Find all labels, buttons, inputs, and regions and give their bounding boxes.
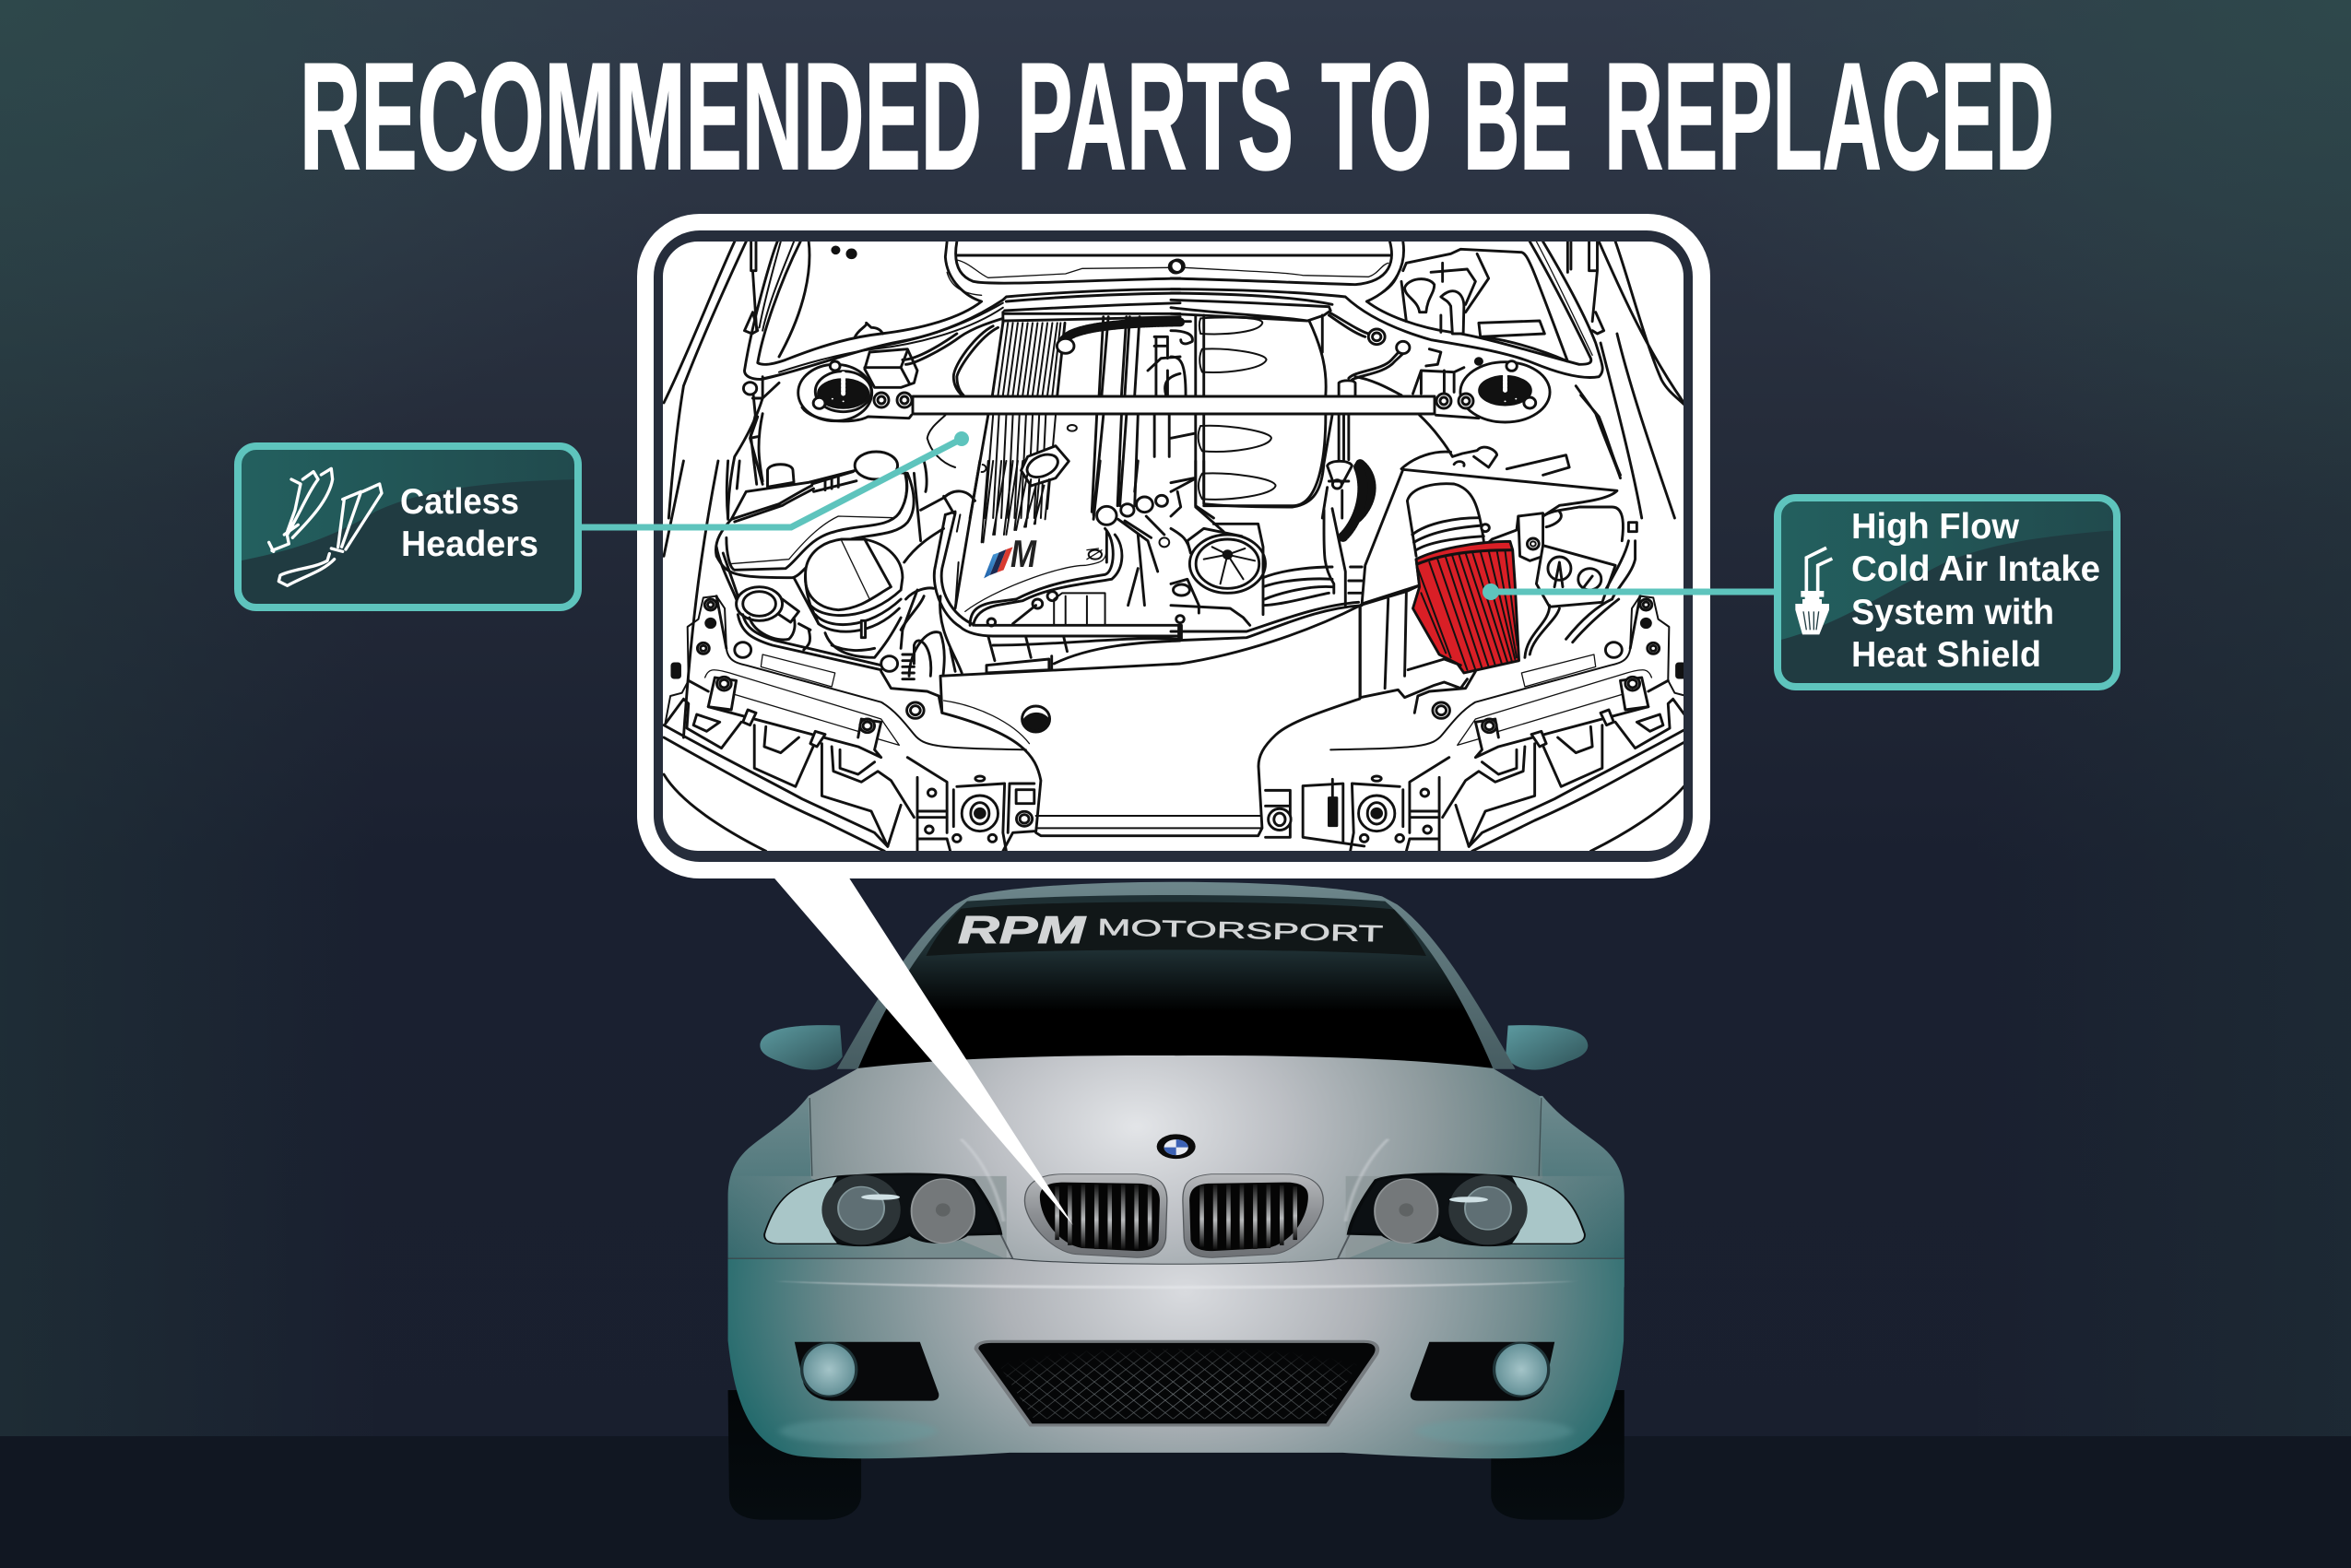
engine upper right: manifold, strut tower, fuse box [1171, 242, 1687, 518]
windshield banner: RPM logo: RPM [958, 908, 1086, 951]
label lines: Heat Shield [1851, 635, 2041, 675]
title: PARTS [1017, 31, 1294, 201]
duct panel [940, 606, 1360, 836]
icon: headers [269, 468, 382, 585]
callout: High Flow Cold Air Intake System with Heat Shield [1778, 498, 2117, 687]
left panel bracket and bolt [1003, 784, 1034, 851]
mirrors [760, 1025, 1588, 1070]
label: Catless: Catless [400, 482, 519, 522]
engine bay line drawing [664, 242, 1693, 851]
left headlight [765, 1174, 1000, 1245]
lower-left front structure [664, 596, 1026, 851]
kidney grille [1024, 1174, 1323, 1257]
air duct and front rails [664, 596, 1693, 851]
label lines: System with [1851, 593, 2054, 632]
callout: Catless Headers [238, 446, 578, 607]
callout bubble frame [637, 214, 1710, 878]
M logo text: M [1010, 532, 1037, 575]
radiator shroud hole [944, 701, 1050, 744]
BMW badge [1157, 1134, 1196, 1159]
windshield [858, 895, 1493, 1068]
mirrored front structure [1330, 596, 1693, 851]
car illustration [728, 882, 1624, 1520]
icon: air intake filter [1795, 548, 1832, 634]
tires [728, 1390, 1624, 1520]
left leader dot [954, 431, 969, 446]
title: RECOMMENDED [300, 31, 982, 201]
engine mid right: throttle, shield, filter, plate [1171, 461, 1636, 698]
right panel bracket and bar [1266, 779, 1365, 846]
right headlight [1349, 1174, 1584, 1245]
callout bubble pointer [764, 867, 1073, 1225]
engine mid left: tank, canister, cover [664, 452, 1180, 737]
body fenders [728, 1096, 1624, 1287]
right leader dot [1483, 584, 1499, 600]
label lines: Cold Air Intake [1851, 549, 2100, 589]
strut brace bar [874, 393, 1473, 414]
title: TO [1321, 31, 1432, 201]
title: BE [1463, 31, 1572, 201]
right fog lamp [1411, 1342, 1554, 1401]
bumper [728, 1258, 1624, 1458]
windshield banner: MOTORSPORT: MOTORSPORT [1097, 914, 1383, 948]
radiator panel lower bands [1036, 816, 1260, 828]
label: Headers: Headers [401, 525, 538, 564]
engine upper left: firewall, strut tower, fins [664, 242, 1182, 518]
right leader line [1491, 588, 1774, 595]
hood [809, 1055, 1542, 1265]
label lines: High Flow [1851, 507, 2020, 547]
roof and pillars [837, 882, 1516, 1069]
left leader line [582, 439, 962, 527]
lower air intake with mesh [976, 1341, 1377, 1425]
left fog lamp [795, 1342, 939, 1401]
